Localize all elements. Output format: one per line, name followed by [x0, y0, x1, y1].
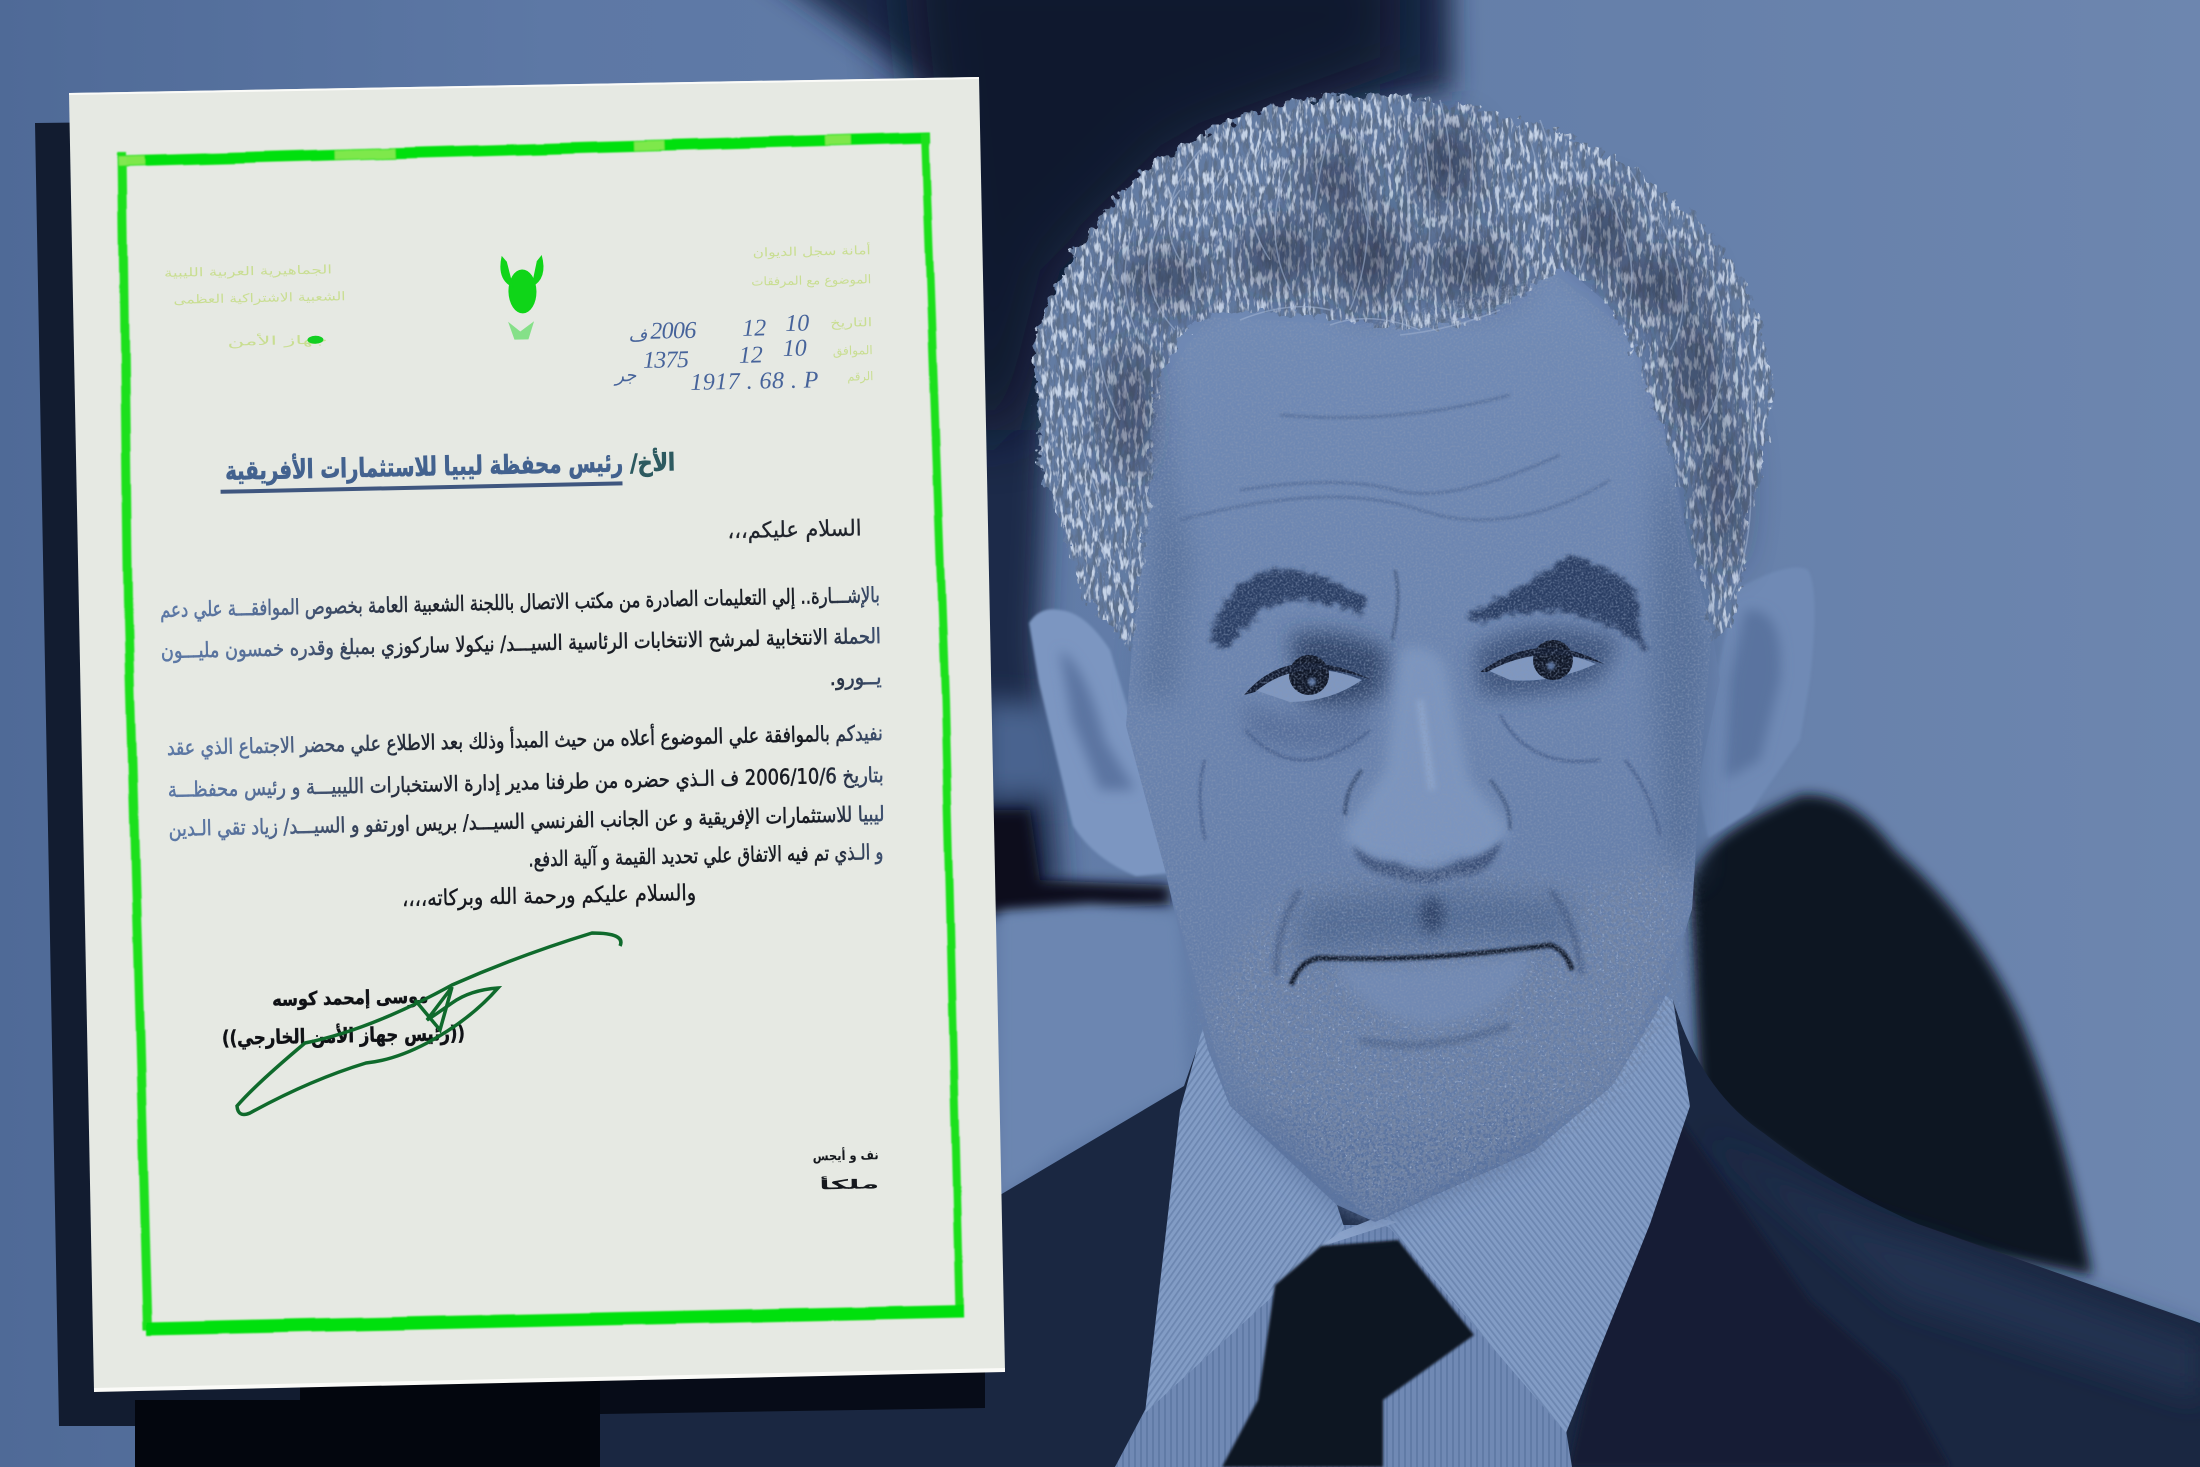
face — [1126, 250, 1720, 1222]
hair dark patches — [1112, 125, 1738, 570]
handwritten date and reference: 1917 . 68 . P — [690, 367, 819, 396]
faint letterhead right — [751, 242, 873, 387]
necktie — [1222, 1240, 1474, 1467]
handwritten date and reference: جر — [613, 365, 637, 387]
drop shadow of document — [35, 120, 300, 1426]
faint letterhead right: الموافق — [833, 343, 873, 359]
hair — [1034, 96, 1769, 650]
eye sockets — [1240, 627, 1620, 751]
letterhead emblem — [500, 255, 545, 340]
paragraph two: بتاريخ 2006/10/6 ف الـذي حضره من طرفنا مدير إدارة الاستخبارات الليبيـــة و رئيس محفظـــة — [168, 763, 884, 803]
handwritten date and reference: 2006 — [650, 318, 697, 345]
skin grain — [1126, 273, 1712, 1222]
faint letterhead right: أمانة سجل الديوان — [753, 242, 871, 261]
addressee heading: الأخ/ — [630, 447, 675, 477]
mouth — [1291, 945, 1572, 1045]
signatory name and title: ((رئيس جهاز الأمن الخارجي)) — [222, 1020, 465, 1051]
blurred dark shoulder on the right — [1690, 795, 2092, 1275]
closing salutation: والسلام عليكم ورحمة الله وبركاته،،،، — [402, 881, 696, 912]
faint letterhead right: الرقم — [847, 369, 873, 385]
paragraph two — [167, 719, 886, 880]
paragraph two: ليبيا للاستثمارات الإفريقية و عن الجانب الفرنسي السيـــد/ بريس اورتفو و السيـــد/ زياد تقي الـدين — [168, 802, 885, 841]
handwritten signature — [237, 933, 621, 1114]
signatory name and title — [221, 985, 465, 1051]
handwritten date and reference: 12 — [739, 342, 763, 369]
moustache shadow — [1295, 890, 1575, 960]
man's jacket — [135, 1000, 2200, 1467]
signatory name and title: موسى إمحمد كوسه — [272, 986, 428, 1011]
nose — [1344, 647, 1510, 883]
addressee heading: رئيس محفظة ليبيا للاستثمارات الأفريقية — [225, 446, 623, 487]
paragraph two: نفيدكم بالموافقة علي الموضوع أعلاه من حيث المبدأ وذلك بعد الاطلاع علي محضر الاجتماع الذي عقد — [167, 719, 883, 761]
blurred background figure behind the man — [725, 0, 1452, 915]
handwritten date and reference: 1375 — [643, 347, 689, 374]
handwritten date and reference — [612, 310, 819, 398]
paragraph two: و الـذي تم فيه الاتفاق علي تحديد القيمة و آلية الدفع. — [528, 839, 884, 872]
green page border — [119, 134, 964, 1330]
paragraph one: الحملة الانتخابية لمرشح الانتخابات الرئاسية السيـــد/ نيكولا ساركوزي بمبلغ وقدره خمسون مليـــون — [161, 624, 881, 663]
forehead wrinkles — [1180, 395, 1610, 640]
shirt and collar — [1115, 990, 1690, 1467]
faint letterhead left: الشعبية الاشتراكية العظمى — [173, 289, 346, 308]
light hair strands — [1060, 100, 1752, 600]
faint letterhead right: التاريخ — [830, 315, 872, 331]
eyebrows — [1210, 555, 1645, 650]
faint letterhead left: جهاز الأمن — [227, 332, 328, 350]
document paper — [69, 77, 1005, 1392]
nasolabial folds — [1276, 890, 1582, 975]
handwritten date and reference: 12 — [742, 315, 767, 342]
blurred pale shirt of background figure — [1000, 905, 1187, 1195]
handwritten date and reference: ف — [628, 325, 648, 345]
faint letterhead right: الموضوع مع المرفقات — [751, 272, 871, 290]
philtrum shadow — [1420, 897, 1444, 933]
paragraph one: يــورو. — [829, 665, 882, 690]
ears — [1029, 568, 1815, 876]
paragraph one — [160, 583, 882, 704]
handwritten date and reference: 10 — [782, 336, 807, 362]
stubble — [1205, 850, 1680, 1215]
typist initials: ملكأ — [819, 1175, 879, 1193]
typist initials — [812, 1146, 879, 1194]
typist initials: نف و أيجس — [812, 1146, 879, 1165]
faint letterhead left: الجماهيرية العربية الليبية — [164, 262, 332, 281]
faint letterhead left — [164, 262, 347, 351]
eye: left — [1244, 655, 1372, 702]
under-eye creases — [1200, 715, 1660, 840]
eye: right — [1480, 640, 1604, 681]
handwritten date and reference: 10 — [785, 310, 809, 337]
greeting: السلام عليكم،،، — [727, 516, 862, 544]
facial shading and features — [1126, 273, 1712, 1222]
paragraph one: بالإشـــارة.. إلي التعليمات الصادرة من مكتب الاتصال باللجنة الشعبية العامة بخصوص الموافقـــة علي دعم — [160, 583, 880, 623]
document text rotated with page — [153, 242, 893, 1207]
